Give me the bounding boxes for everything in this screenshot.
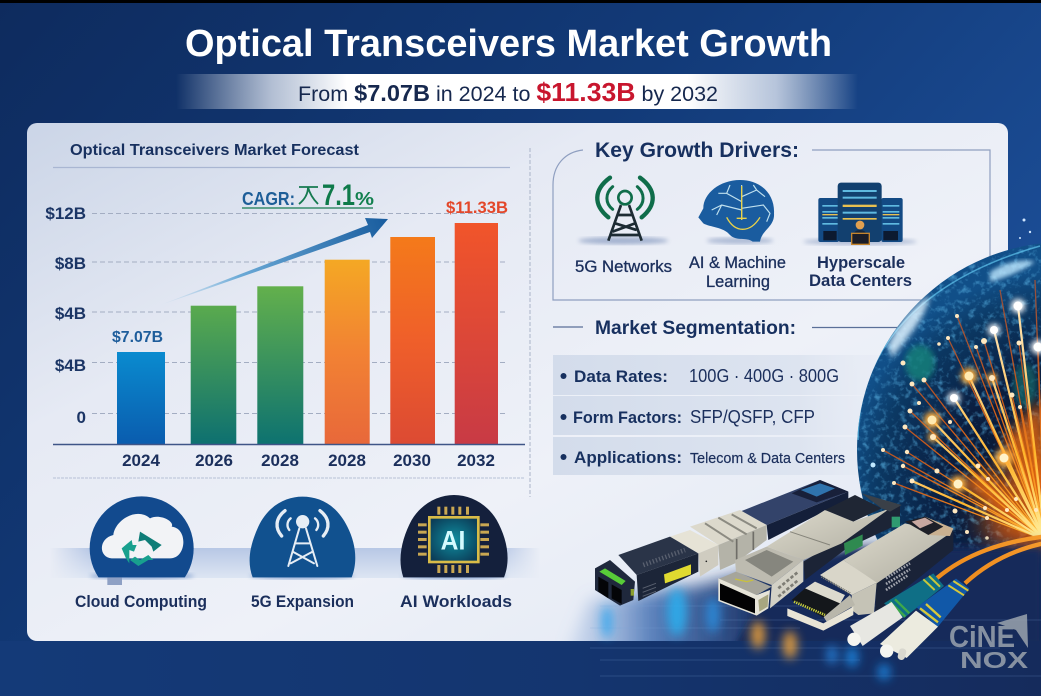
illustration: transceiver modules [595,480,1041,661]
row: form factors: Form Factors: [573,408,682,427]
segmentation heading: Market Segmentation: [595,317,796,339]
icon: AI chip [400,495,508,577]
icon: 5G expansion [250,497,355,577]
fiber glow [924,299,1041,492]
thin fibers [883,280,1041,540]
x axis labels: 2024 [122,451,160,470]
row: form factors [553,396,903,435]
row: data rates [553,355,903,395]
row: data rates: Data Rates: [574,367,668,386]
row: applications: Telecom & Data Centers [690,450,845,467]
value label 2032: $11.33B [446,199,508,217]
y axis labels: $4B [55,304,86,323]
label: hyperscale data centers: Data Centers [809,271,912,290]
module 1 [595,480,848,606]
icon: cloud computing [90,496,194,585]
bright fibers [912,306,1041,540]
module 2 [718,493,902,616]
watermark: CineNox: NOX [960,647,1029,673]
row: applications: Applications: [574,448,682,467]
light reflections [602,588,890,680]
CAGR label [242,179,374,212]
label: AI and machine learning: AI & Machine [689,254,786,272]
icon: 5G network tower [578,178,668,244]
panel: market segmentation [553,317,903,475]
glowing fiber wedges [958,400,1041,545]
subtitle: From $7.07B in 2024 to $11.33B by 2032 [298,77,718,107]
illustration: reflective floor [0,548,1041,696]
subtitle band [176,74,858,109]
label: AI and machine learning [689,254,786,291]
x axis labels: 2028 [328,451,366,470]
row: applications [553,437,903,475]
drivers heading: Key Growth Drivers: [595,139,799,162]
x axis labels: 2032 [457,451,495,470]
CAGR label: 7.1 [322,179,355,212]
x axis labels [122,451,495,470]
label: 5G expansion: 5G Expansion [251,592,354,611]
fiber connector left [847,573,944,646]
panel: bottom categories [50,495,540,611]
x axis labels: 2026 [195,451,233,470]
label: cloud computing: Cloud Computing [75,592,207,611]
growth arrow [155,218,388,307]
fiber tips [870,302,1041,540]
panel: key growth drivers [553,139,990,300]
label: AI workloads: AI Workloads [400,592,512,611]
y axis labels: $12B [45,204,86,223]
panel: main card [27,123,1008,641]
label: hyperscale data centers [809,253,912,290]
x axis labels: 2028 [261,451,299,470]
y axis labels [45,204,86,427]
chart heading: Optical Transceivers Market Forecast [70,142,359,159]
row: data rates: 100G · 400G · 800G [689,366,839,386]
y axis labels: $8B [55,254,86,273]
row: form factors: SFP/QSFP, CFP [690,407,815,427]
icon: AI brain [698,180,774,244]
illustration: fiber optic globe [857,218,1041,556]
CAGR label: % [355,189,374,209]
bars [117,223,498,444]
y axis labels: 0 [77,408,86,427]
title: Optical Transceivers Market Growth [185,23,832,65]
fiber cables [937,537,1041,583]
fiber connector right [880,579,969,661]
icon: AI chip: AI [441,525,465,555]
watermark: CineNox: CiNE [949,619,1015,654]
label: 5G networks: 5G Networks [575,258,672,276]
y axis labels: $4B [55,356,86,375]
x axis labels: 2030 [393,451,431,470]
label: AI and machine learning: Learning [706,273,770,291]
module 3 [787,517,953,631]
value label 2024: $7.07B [112,329,163,346]
panel: market forecast chart [45,142,525,478]
icon: data center servers [803,183,917,245]
watermark: CineNox [949,614,1029,673]
label: hyperscale data centers: Hyperscale [817,253,905,272]
CAGR label: CAGR: [242,189,295,209]
